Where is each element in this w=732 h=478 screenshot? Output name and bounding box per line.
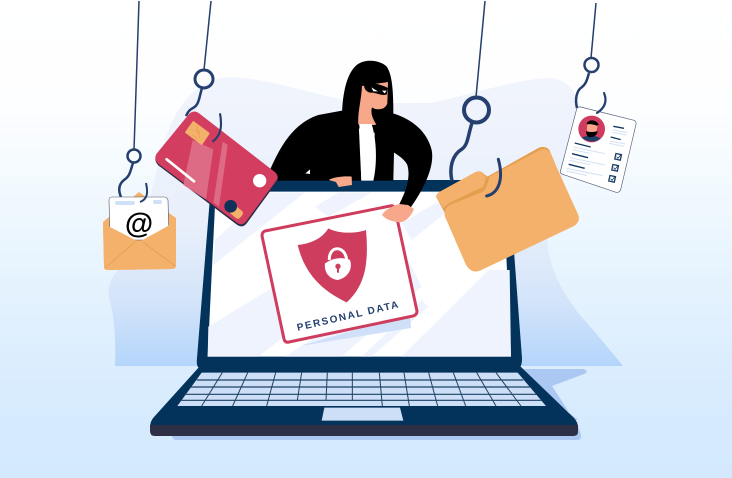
hook barb xyxy=(140,183,147,202)
envelope front xyxy=(103,218,176,270)
folder xyxy=(436,147,579,272)
touchpad xyxy=(322,408,403,421)
id card hook barb xyxy=(597,93,606,113)
mask xyxy=(364,83,388,95)
letter xyxy=(109,197,169,240)
hook barb xyxy=(487,159,501,196)
hacker xyxy=(270,61,432,208)
folder back xyxy=(436,147,555,213)
laptop shadow xyxy=(172,369,587,440)
folder front xyxy=(444,149,579,272)
card edge xyxy=(155,113,278,226)
left hand xyxy=(329,176,352,187)
shirt xyxy=(359,124,376,181)
personal data card xyxy=(262,206,417,346)
id card xyxy=(560,107,636,192)
padlock xyxy=(325,249,351,280)
chip xyxy=(186,122,209,144)
card body xyxy=(560,107,636,192)
hologram xyxy=(253,174,266,187)
laptop lid xyxy=(197,180,522,368)
text lines xyxy=(569,126,624,168)
laptop front edge xyxy=(150,425,578,436)
card frame xyxy=(262,206,417,342)
hook: email xyxy=(119,1,140,197)
magnetic stripe xyxy=(167,159,194,181)
card sheen xyxy=(183,140,228,207)
hook: folder xyxy=(451,1,489,181)
laptop base xyxy=(150,366,578,428)
keyboard xyxy=(177,373,546,421)
folder tab xyxy=(436,171,486,208)
hook: credit card xyxy=(186,1,213,116)
card logo xyxy=(228,205,244,220)
background blob xyxy=(109,77,623,366)
credit card xyxy=(155,111,278,226)
envelope back xyxy=(103,192,176,270)
card label: PERSONAL DATA xyxy=(296,299,401,334)
hair xyxy=(342,61,393,137)
shield xyxy=(298,228,367,302)
face xyxy=(358,82,388,125)
card body xyxy=(155,111,278,224)
hand over card xyxy=(382,204,414,222)
envelope xyxy=(103,183,176,270)
card shadow xyxy=(300,314,411,346)
laptop screen xyxy=(208,192,511,357)
hoodie xyxy=(270,111,361,181)
at sign: @ xyxy=(125,208,153,240)
avatar xyxy=(578,116,605,142)
laptop xyxy=(150,180,578,436)
checkboxes xyxy=(609,154,621,182)
hook: id card xyxy=(576,3,598,108)
hook barb xyxy=(212,113,221,142)
